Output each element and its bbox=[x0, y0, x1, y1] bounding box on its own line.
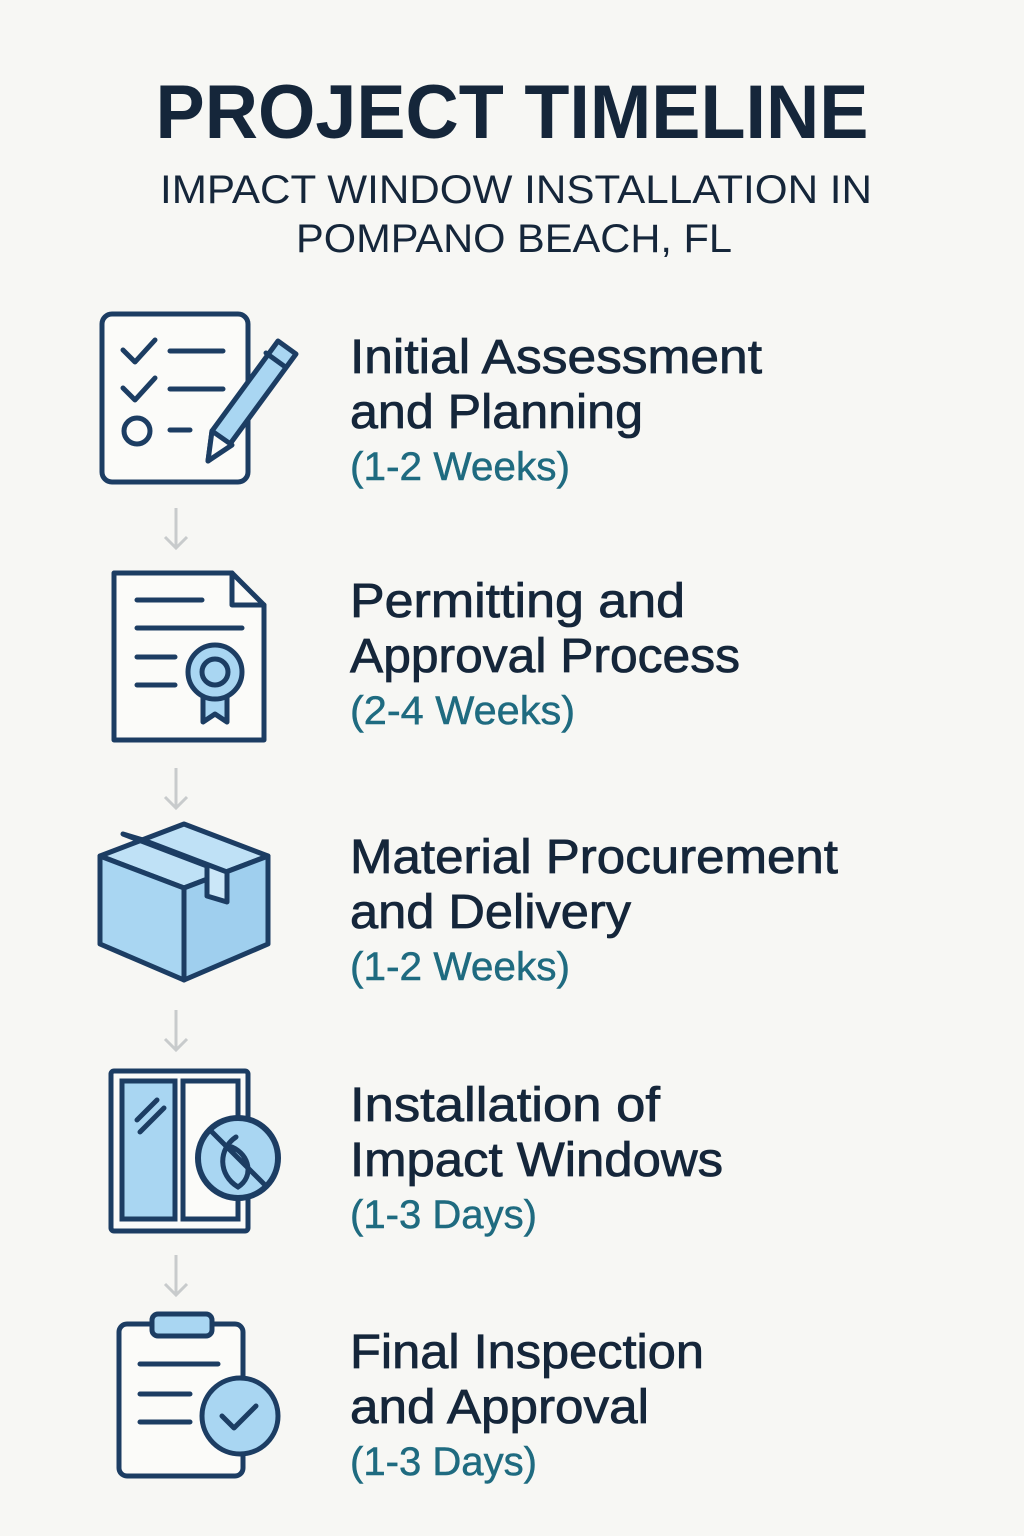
icon: impact window bbox=[111, 1071, 278, 1231]
step 2 text: Approval Process bbox=[350, 630, 740, 683]
step 4 text: (1-3 Days) bbox=[350, 1193, 537, 1237]
step 3 text: (1-2 Weeks) bbox=[350, 945, 570, 989]
step 1 text: and Planning bbox=[350, 386, 643, 439]
step 5 text bbox=[350, 1326, 704, 1484]
arrow 3 bbox=[165, 1010, 187, 1050]
step 2 text: Permitting and bbox=[350, 575, 685, 628]
step 1 text: (1-2 Weeks) bbox=[350, 445, 570, 489]
title: PROJECT TIMELINE bbox=[156, 70, 868, 155]
step 2 text bbox=[350, 575, 740, 733]
arrow 4 bbox=[165, 1255, 187, 1295]
icon: permit document bbox=[114, 573, 264, 740]
step 5 text: (1-3 Days) bbox=[350, 1440, 537, 1484]
step 3 text bbox=[350, 831, 838, 989]
subtitle bbox=[160, 168, 872, 261]
step 1 text bbox=[350, 331, 762, 489]
arrow 2 bbox=[165, 768, 187, 808]
arrow 1 bbox=[165, 508, 187, 548]
step 5 text: and Approval bbox=[350, 1381, 649, 1434]
icon: checklist with pencil bbox=[102, 314, 296, 482]
step 4 text: Installation of bbox=[350, 1079, 661, 1132]
step 1 text: Initial Assessment bbox=[350, 331, 762, 384]
icon: clipboard check bbox=[119, 1314, 278, 1476]
step 3 text: and Delivery bbox=[350, 886, 631, 939]
step 5 text: Final Inspection bbox=[350, 1326, 704, 1379]
step 3 text: Material Procurement bbox=[350, 831, 838, 884]
subtitle: IMPACT WINDOW INSTALLATION IN bbox=[160, 168, 872, 212]
subtitle: POMPANO BEACH, FL bbox=[296, 217, 732, 261]
step 4 text: Impact Windows bbox=[350, 1134, 723, 1187]
step 2 text: (2-4 Weeks) bbox=[350, 689, 575, 733]
icon: box bbox=[100, 824, 268, 980]
step 4 text bbox=[350, 1079, 723, 1237]
